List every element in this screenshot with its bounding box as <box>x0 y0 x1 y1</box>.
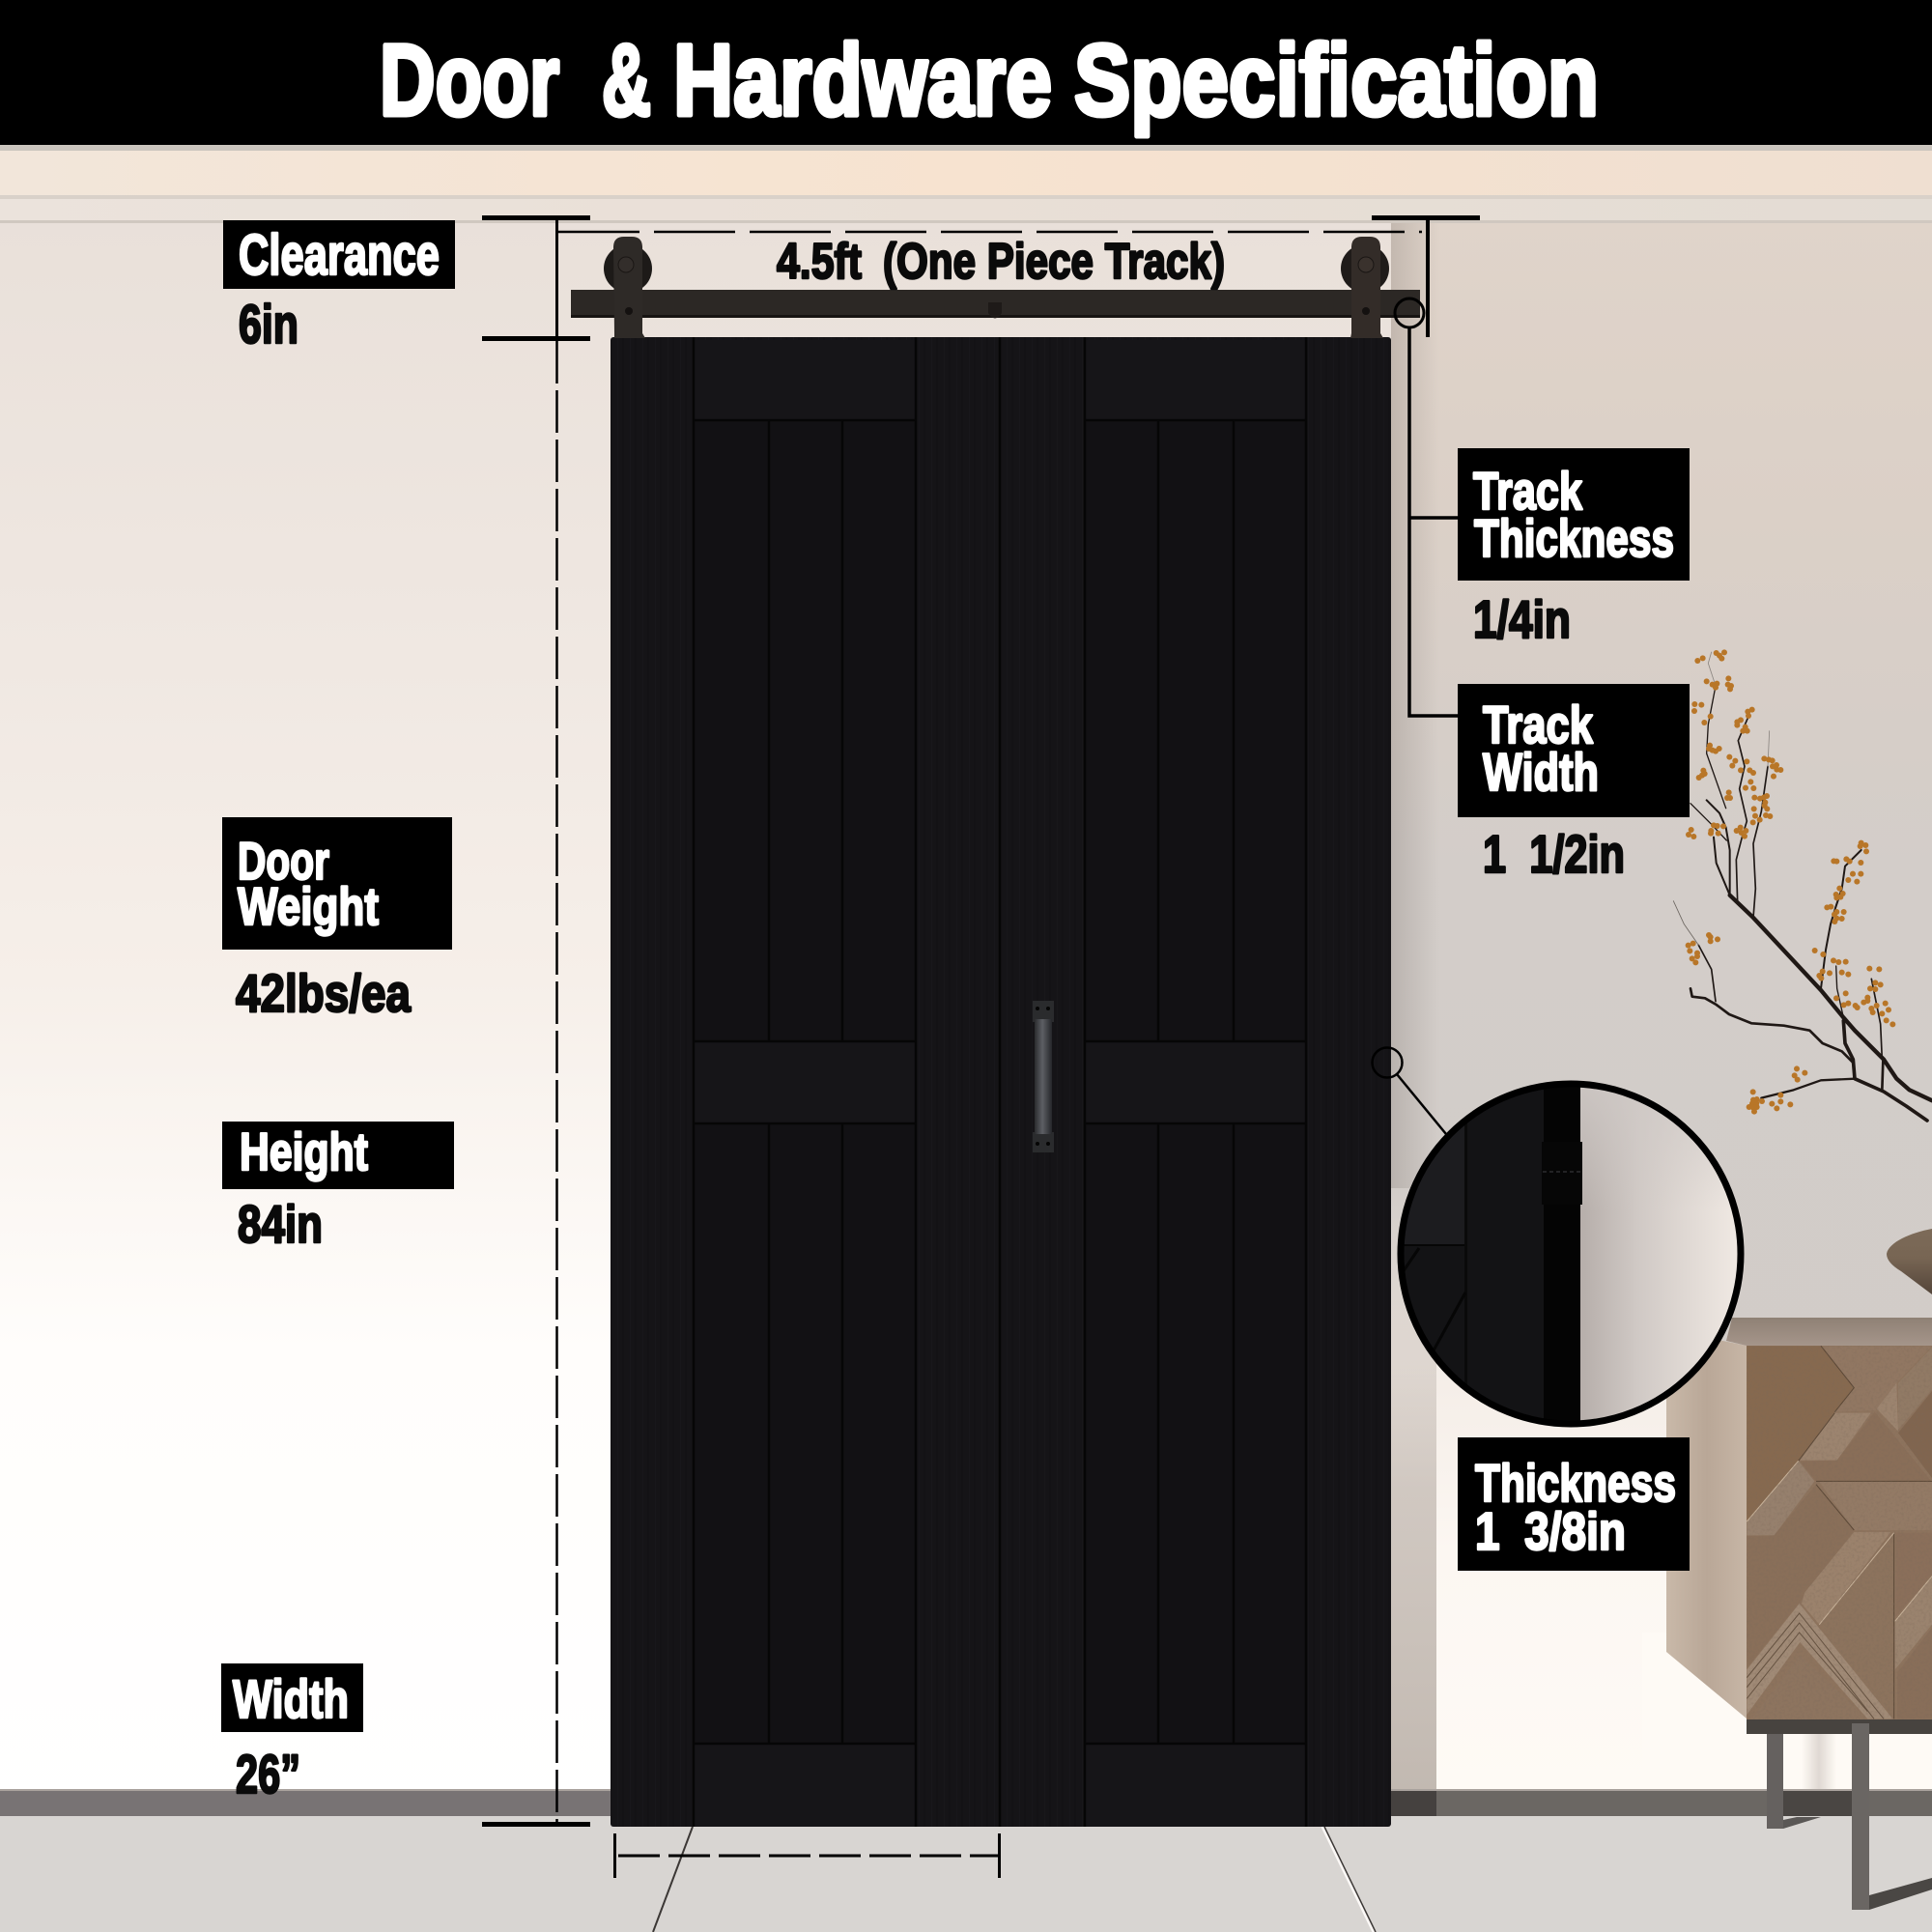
label: width <box>221 1663 363 1805</box>
title bar: Door <box>380 24 559 137</box>
vase <box>1887 1229 1932 1294</box>
label: track thickness: Track <box>1473 461 1582 521</box>
label: width: 26” <box>236 1744 300 1805</box>
label: clearance: 6in <box>239 294 298 355</box>
decorative branches with berries <box>1673 649 1932 1121</box>
track length label <box>777 234 1225 290</box>
track stop <box>988 302 1002 319</box>
panel grooves <box>694 337 1306 1827</box>
title bar: & <box>602 24 651 137</box>
label: clearance <box>223 220 455 355</box>
label: door thickness: 1 3/8in <box>1475 1501 1626 1561</box>
label: door weight: 42lbs/ea <box>236 963 411 1023</box>
title bar: Specification <box>1074 24 1599 137</box>
track length label: (One Piece Track) <box>883 234 1225 290</box>
label: height: 84in <box>238 1194 323 1254</box>
label: track width <box>1458 684 1690 884</box>
track length label: 4.5ft <box>777 234 862 290</box>
title bar: Hardware <box>673 24 1052 137</box>
label: door weight: Weight <box>238 876 379 936</box>
label: door weight <box>222 817 452 1023</box>
label: door weight: Door <box>238 831 329 891</box>
label: track thickness: Thickness <box>1474 508 1674 568</box>
left roller hanger <box>604 237 652 338</box>
rails <box>695 340 1306 1827</box>
door handle <box>1033 1001 1054 1152</box>
label: height: Height <box>240 1122 368 1181</box>
plank panels <box>695 420 1306 1744</box>
label: door thickness <box>1458 1437 1690 1571</box>
sliding track <box>571 237 1420 338</box>
title bar <box>0 0 1932 145</box>
label: track thickness: 1/4in <box>1473 589 1571 649</box>
label: track width: 1 1/2in <box>1483 824 1625 884</box>
dimension: door width line <box>613 1833 1001 1878</box>
label: door thickness: Thickness <box>1475 1453 1676 1513</box>
dimension: track length line <box>558 215 1480 337</box>
dimension: clearance and height lines <box>482 215 590 1827</box>
label: clearance: Clearance <box>239 223 440 287</box>
cabinet with geometric relief <box>1666 1318 1932 1910</box>
label: track width: Width <box>1483 742 1599 802</box>
label: width: Width <box>233 1668 349 1729</box>
door slab <box>611 337 1391 1827</box>
leader lines: track callouts <box>1395 298 1458 716</box>
floor tile joints <box>653 1827 1376 1932</box>
barn door <box>611 337 1391 1827</box>
label: height <box>222 1122 454 1254</box>
label: track width: Track <box>1483 695 1593 754</box>
label: track thickness <box>1458 448 1690 649</box>
right roller hanger <box>1341 237 1389 338</box>
thickness magnifier <box>1372 1047 1745 1439</box>
